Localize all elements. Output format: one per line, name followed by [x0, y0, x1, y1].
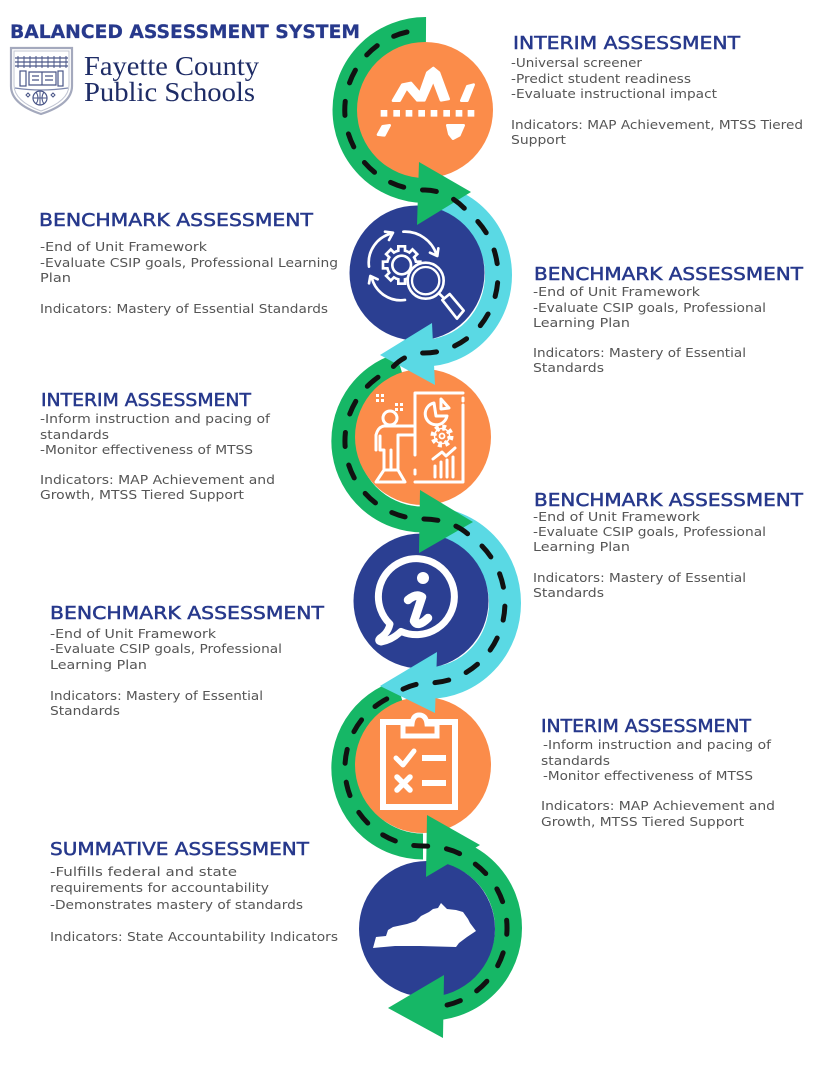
body: Indicators: Mastery of Essential Standards [40, 301, 328, 316]
body: -End of Unit Framework [533, 284, 701, 299]
body: -Evaluate CSIP goals, Professional Learning [40, 255, 338, 270]
body: Indicators: Mastery of Essential [50, 688, 263, 703]
logo: Fayette County Public Schools [11, 48, 260, 114]
body: -Evaluate CSIP goals, Professional [50, 641, 282, 656]
body: -Evaluate CSIP goals, Professional [533, 300, 766, 315]
circle: benchmark 2 [354, 534, 488, 668]
body: -Universal screener [511, 55, 643, 70]
body: requirements for accountability [50, 880, 270, 895]
text block: interim assessment left [40, 391, 275, 502]
text block: interim assessment right [541, 717, 775, 829]
heading: INTERIM ASSESSMENT [41, 391, 251, 411]
arrowhead: cyan 1 [380, 323, 435, 385]
green arc 3 [344, 693, 423, 847]
icon: wave chart [378, 68, 474, 139]
green arc 1 [346, 30, 426, 190]
logo text: Fayette County [84, 51, 260, 81]
title: BALANCED ASSESSMENT SYSTEM [10, 22, 360, 43]
body [533, 509, 766, 600]
heading: INTERIM ASSESSMENT [513, 34, 740, 54]
body: -End of Unit Framework [50, 626, 217, 641]
text block: interim assessment 1 [511, 34, 803, 147]
body: Standards [533, 585, 604, 600]
body: Learning Plan [533, 539, 630, 554]
text block: benchmark assessment left 1 [39, 211, 338, 316]
body: Learning Plan [533, 315, 630, 330]
circle: interim 3 [355, 697, 491, 833]
body: Indicators: MAP Achievement and [40, 472, 275, 487]
text block: benchmark assessment left 2 [50, 604, 324, 718]
body [511, 55, 803, 147]
body: Growth, MTSS Tiered Support [40, 487, 244, 502]
body: -Inform instruction and pacing of [40, 411, 271, 426]
arrowhead: green 1 [417, 162, 471, 225]
body: -Predict student readiness [511, 71, 691, 86]
body [50, 864, 338, 944]
body: Plan [40, 270, 71, 285]
text block: benchmark assessment right 1 [533, 265, 803, 375]
heading: BENCHMARK ASSESSMENT [534, 265, 803, 285]
body: -End of Unit Framework [40, 239, 208, 254]
arrowhead: green 4 [388, 975, 444, 1038]
body: Learning Plan [50, 657, 147, 672]
body: Standards [533, 360, 604, 375]
green arc 2 [344, 366, 423, 520]
body [40, 239, 338, 316]
heading: BENCHMARK ASSESSMENT [50, 604, 324, 624]
body: standards [541, 753, 610, 768]
body: Indicators: MAP Achievement and [541, 798, 775, 813]
icon: checklist clipboard [383, 715, 455, 807]
body [40, 411, 275, 502]
icon: presenter with board [376, 393, 463, 482]
body: Support [511, 132, 566, 147]
heading: BENCHMARK ASSESSMENT [39, 211, 313, 231]
cyan arc 2 [428, 523, 505, 683]
heading: INTERIM ASSESSMENT [541, 717, 751, 737]
dashed path [345, 32, 507, 1006]
arrow ribbon: serpentine arcs [344, 30, 508, 1007]
body: -End of Unit Framework [533, 509, 701, 524]
body: Indicators: Mastery of Essential [533, 570, 746, 585]
arrowhead: cyan 2 [380, 652, 437, 713]
body [541, 737, 775, 829]
body: Growth, MTSS Tiered Support [541, 814, 744, 829]
circle: benchmark 1 [350, 206, 484, 340]
body: Indicators: MAP Achievement, MTSS Tiered [511, 117, 803, 132]
icon: school shield [11, 48, 72, 114]
text block: benchmark assessment right 2 [533, 491, 803, 600]
body: Standards [50, 703, 120, 718]
body: -Demonstrates mastery of standards [50, 897, 303, 912]
body: Indicators: Mastery of Essential [533, 345, 746, 360]
body: -Fulfills federal and state [50, 864, 237, 879]
icon: Kentucky state silhouette [373, 903, 476, 948]
icon: info speech bubble [378, 559, 454, 642]
body: -Evaluate instructional impact [511, 86, 717, 101]
heading: BENCHMARK ASSESSMENT [534, 491, 803, 511]
body: -Inform instruction and pacing of [543, 737, 772, 752]
body: -Monitor effectiveness of MTSS [40, 442, 253, 457]
text block: summative assessment [50, 840, 338, 944]
heading: SUMMATIVE ASSESSMENT [50, 840, 309, 860]
circle: interim 2 [355, 369, 491, 505]
circle: interim 1 [357, 42, 493, 178]
logo text [84, 51, 260, 107]
body [533, 284, 766, 375]
body: standards [40, 427, 109, 442]
body: -Monitor effectiveness of MTSS [543, 768, 753, 783]
body [50, 626, 282, 718]
green arc 4 [430, 849, 508, 1007]
body: -Evaluate CSIP goals, Professional [533, 524, 766, 539]
circle: summative [359, 861, 495, 997]
arrowhead: green 3 [426, 815, 480, 877]
arrowhead: green 2 [419, 490, 473, 553]
icon: gears and magnifier [369, 232, 464, 319]
logo text: Public Schools [84, 77, 255, 107]
body: Indicators: State Accountability Indicators [50, 929, 338, 944]
cyan arc 1 [424, 197, 498, 353]
